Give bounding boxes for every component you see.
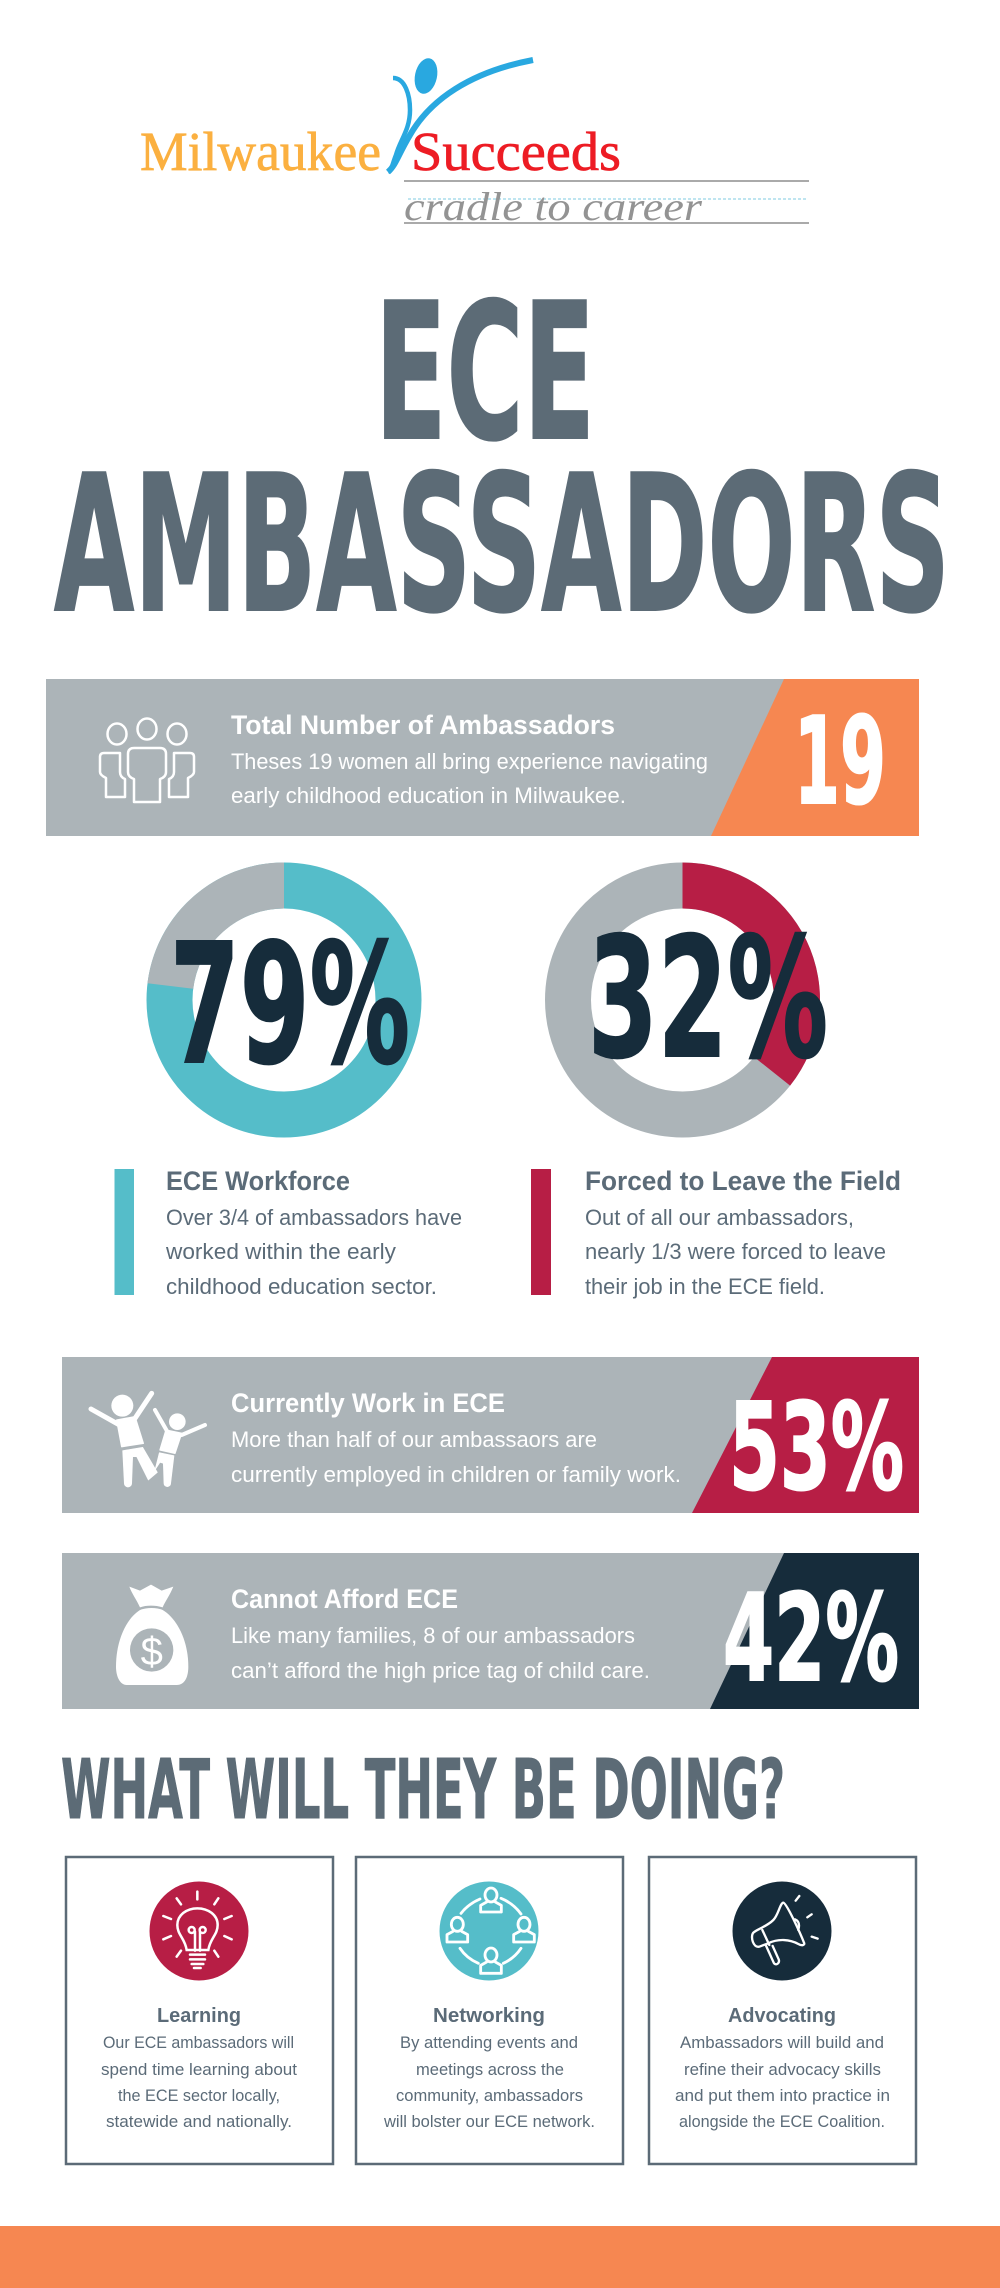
logo: Milwaukee Succeeds: cradle to career <box>404 184 702 229</box>
text block: ECE workforce: Over 3/4 of ambassadors have <box>166 1205 462 1230</box>
text block: ECE workforce: childhood education sector. <box>166 1274 437 1299</box>
donut chart: 32%: 32% <box>588 903 828 1096</box>
donut chart: 79%: 79% <box>170 909 410 1102</box>
text block: forced to leave the field: Forced to Leave the Field <box>585 1166 901 1196</box>
donut chart: 79% <box>148 862 410 1114</box>
panel: cannot afford ECE: Like many families, 8 of our ambassadors <box>231 1623 635 1648</box>
panel: currently work in ECE <box>62 1357 919 1518</box>
text block: forced to leave the field: nearly 1/3 were forced to leave <box>585 1239 886 1264</box>
panel: total number of ambassadors: Theses 19 women all bring experience navigating <box>231 749 708 774</box>
panel: cannot afford ECE <box>62 1553 919 1709</box>
panel: cannot afford ECE: can’t afford the high price tag of child care. <box>231 1658 650 1683</box>
logo: Milwaukee Succeeds: Succeeds <box>411 121 621 182</box>
text block: ECE workforce: ECE Workforce <box>166 1166 350 1196</box>
card: learning: spend time learning about <box>101 2061 297 2079</box>
donut chart: 32% <box>568 862 828 1114</box>
text block: ECE workforce <box>114 1166 462 1299</box>
card: networking: Networking <box>433 2005 545 2027</box>
text block: forced to leave the field <box>531 1166 901 1299</box>
icon: network of people <box>440 1882 538 1980</box>
icon: light bulb <box>150 1882 248 1980</box>
panel: currently work in ECE: More than half of our ambassaors are <box>231 1427 597 1452</box>
card: advocating: refine their advocacy skills <box>684 2061 881 2079</box>
panel: total number of ambassadors <box>46 679 919 836</box>
title <box>54 263 950 655</box>
card: learning: Our ECE ambassadors will <box>103 2034 294 2052</box>
card: advocating <box>649 1857 916 2164</box>
card: advocating: alongside the ECE Coalition. <box>679 2113 885 2131</box>
title: ECE <box>375 263 595 483</box>
card: advocating: Ambassadors will build and <box>680 2034 884 2052</box>
panel: total number of ambassadors: Total Number of Ambassadors <box>231 710 615 740</box>
logo: Milwaukee Succeeds <box>140 56 809 229</box>
icon: money bag <box>116 1585 188 1685</box>
icon: three people <box>100 718 194 802</box>
card: networking: community, ambassadors <box>396 2087 583 2105</box>
card: networking: meetings across the <box>416 2061 564 2079</box>
text block: forced to leave the field: their job in the ECE field. <box>585 1274 825 1299</box>
text block: ECE workforce: worked within the early <box>165 1239 396 1264</box>
panel: cannot afford ECE: Cannot Afford ECE <box>231 1584 458 1614</box>
footer bar <box>0 2226 1000 2288</box>
card: advocating: and put them into practice in <box>675 2087 890 2105</box>
card: networking: By attending events and <box>400 2034 578 2052</box>
card: learning <box>66 1857 333 2164</box>
panel: total number of ambassadors: early childhood education in Milwaukee. <box>231 783 626 808</box>
icon: money bag: $ <box>141 1630 163 1674</box>
card: learning: the ECE sector locally, <box>118 2087 280 2105</box>
card: advocating: Advocating <box>728 2005 836 2027</box>
panel: total number of ambassadors: 19 <box>794 693 886 832</box>
card: learning: statewide and nationally. <box>106 2113 292 2131</box>
card: networking <box>356 1857 623 2164</box>
text block: forced to leave the field: Out of all our ambassadors, <box>585 1205 854 1230</box>
panel: currently work in ECE: Currently Work in ECE <box>231 1388 505 1418</box>
logo figure <box>388 56 533 172</box>
card: learning: Learning <box>157 2005 241 2027</box>
icon: jumping children <box>91 1393 205 1487</box>
logo: Milwaukee Succeeds: Milwaukee <box>140 121 381 182</box>
icon: megaphone <box>732 1882 832 1980</box>
panel: currently work in ECE: currently employed in children or family work. <box>231 1462 681 1487</box>
card: networking: will bolster our ECE network. <box>383 2113 595 2131</box>
